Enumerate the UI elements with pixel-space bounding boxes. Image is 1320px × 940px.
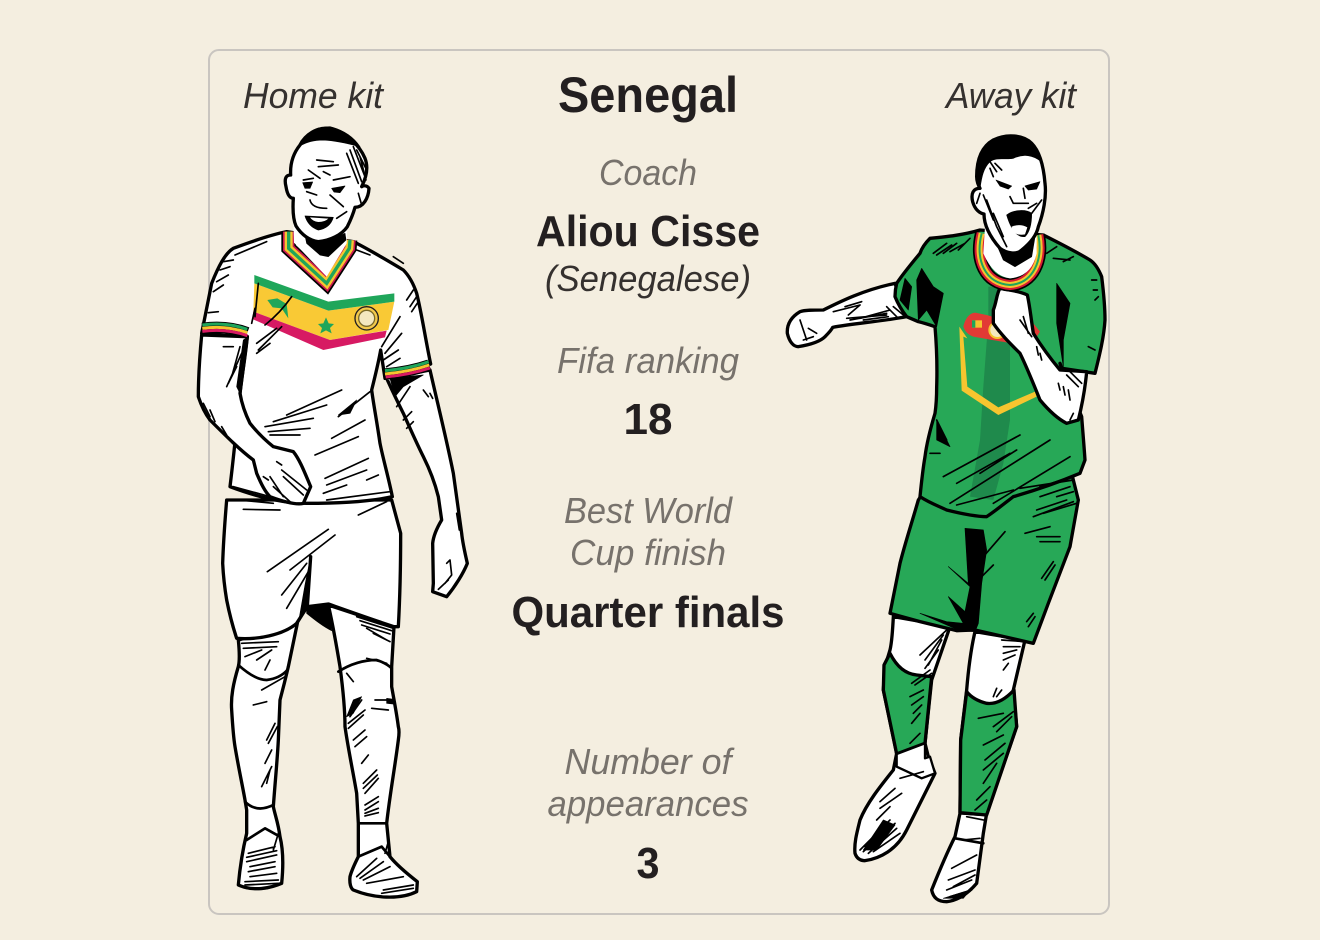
away jersey centre stripe	[970, 287, 1010, 500]
label: home kit: Home kit	[243, 75, 385, 116]
stat: fifa ranking: 18	[624, 395, 672, 444]
home shorts	[223, 500, 401, 639]
stat: best world cup finish: Quarter finals	[512, 588, 784, 637]
away jersey	[895, 230, 1105, 517]
stat: coach: Coach	[599, 152, 697, 193]
home cuffs	[202, 324, 430, 377]
away shirt folds	[800, 238, 1098, 513]
home jersey	[202, 232, 431, 503]
stat: coach	[536, 152, 760, 299]
away legs and shorts	[855, 467, 1078, 902]
home shirt folds	[203, 242, 433, 503]
stat: number of appearances: appearances	[548, 783, 748, 824]
home arm left side	[198, 335, 311, 504]
home collar	[289, 232, 350, 283]
stat: number of appearances	[548, 741, 748, 888]
home legs and shorts	[223, 500, 417, 897]
away left arm	[787, 283, 907, 347]
label: away kit: Away kit	[944, 75, 1078, 116]
home head and neck	[293, 220, 347, 277]
player illustration: away kit	[787, 136, 1105, 902]
stat: best world cup finish: Cup finish	[570, 532, 726, 573]
away badge	[959, 313, 1040, 415]
stat: number of appearances: 3	[636, 839, 660, 888]
title: Senegal	[558, 67, 738, 123]
stat: number of appearances: Number of	[564, 741, 735, 782]
stat: best world cup finish	[512, 490, 784, 637]
away collar	[980, 233, 1040, 285]
stat: coach: (Senegalese)	[545, 258, 751, 299]
player illustration: home kit	[198, 127, 467, 897]
away shorts	[890, 467, 1078, 643]
away right arm	[993, 288, 1087, 423]
stat: best world cup finish: Best World	[564, 490, 733, 531]
away neck and head	[983, 227, 1037, 278]
chest band	[252, 275, 394, 350]
stat: fifa ranking	[557, 340, 739, 444]
home arm right side with hand	[387, 370, 467, 597]
card border	[209, 50, 1109, 914]
stat: fifa ranking: Fifa ranking	[557, 340, 739, 381]
stat: coach: Aliou Cisse	[536, 207, 760, 256]
